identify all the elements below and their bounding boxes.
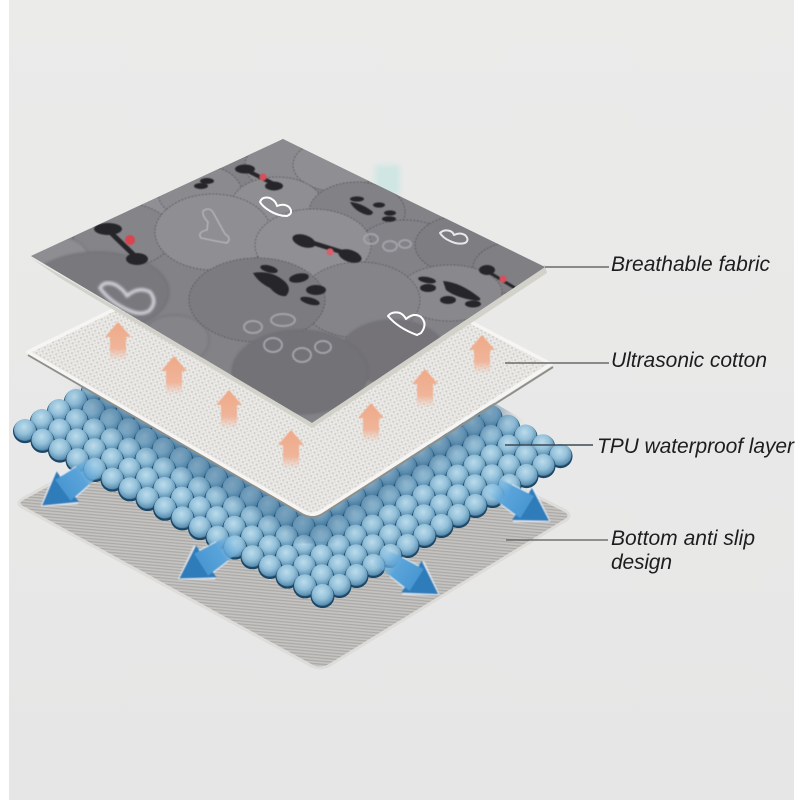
label: Bottom anti slip design — [506, 527, 755, 574]
arrow: water flow lower right — [368, 539, 449, 610]
label: Ultrasonic cotton: Ultrasonic cotton — [611, 349, 767, 372]
layer: ultrasonic cotton — [28, 225, 553, 517]
layer: bottom anti slip — [19, 363, 569, 668]
layer: TPU waterproof beads — [13, 385, 572, 609]
label: Breathable fabric: Breathable fabric — [611, 253, 770, 276]
arrow: water flow right — [478, 467, 559, 537]
icon: light paw outlines — [244, 234, 411, 362]
arrow: water flow left — [31, 448, 111, 521]
label: Bottom anti slip design: design — [611, 551, 672, 574]
label: TPU waterproof layer: TPU waterproof layer — [597, 435, 795, 458]
label: Bottom anti slip design: Bottom anti slip — [611, 527, 755, 550]
layer: breathable fabric — [25, 139, 557, 428]
icon: hearts — [100, 198, 468, 335]
icon: paw prints — [194, 178, 481, 308]
arrows: breathable air rising — [105, 322, 495, 468]
icon: bones — [94, 164, 515, 288]
arrow: water flow centre — [169, 524, 250, 595]
